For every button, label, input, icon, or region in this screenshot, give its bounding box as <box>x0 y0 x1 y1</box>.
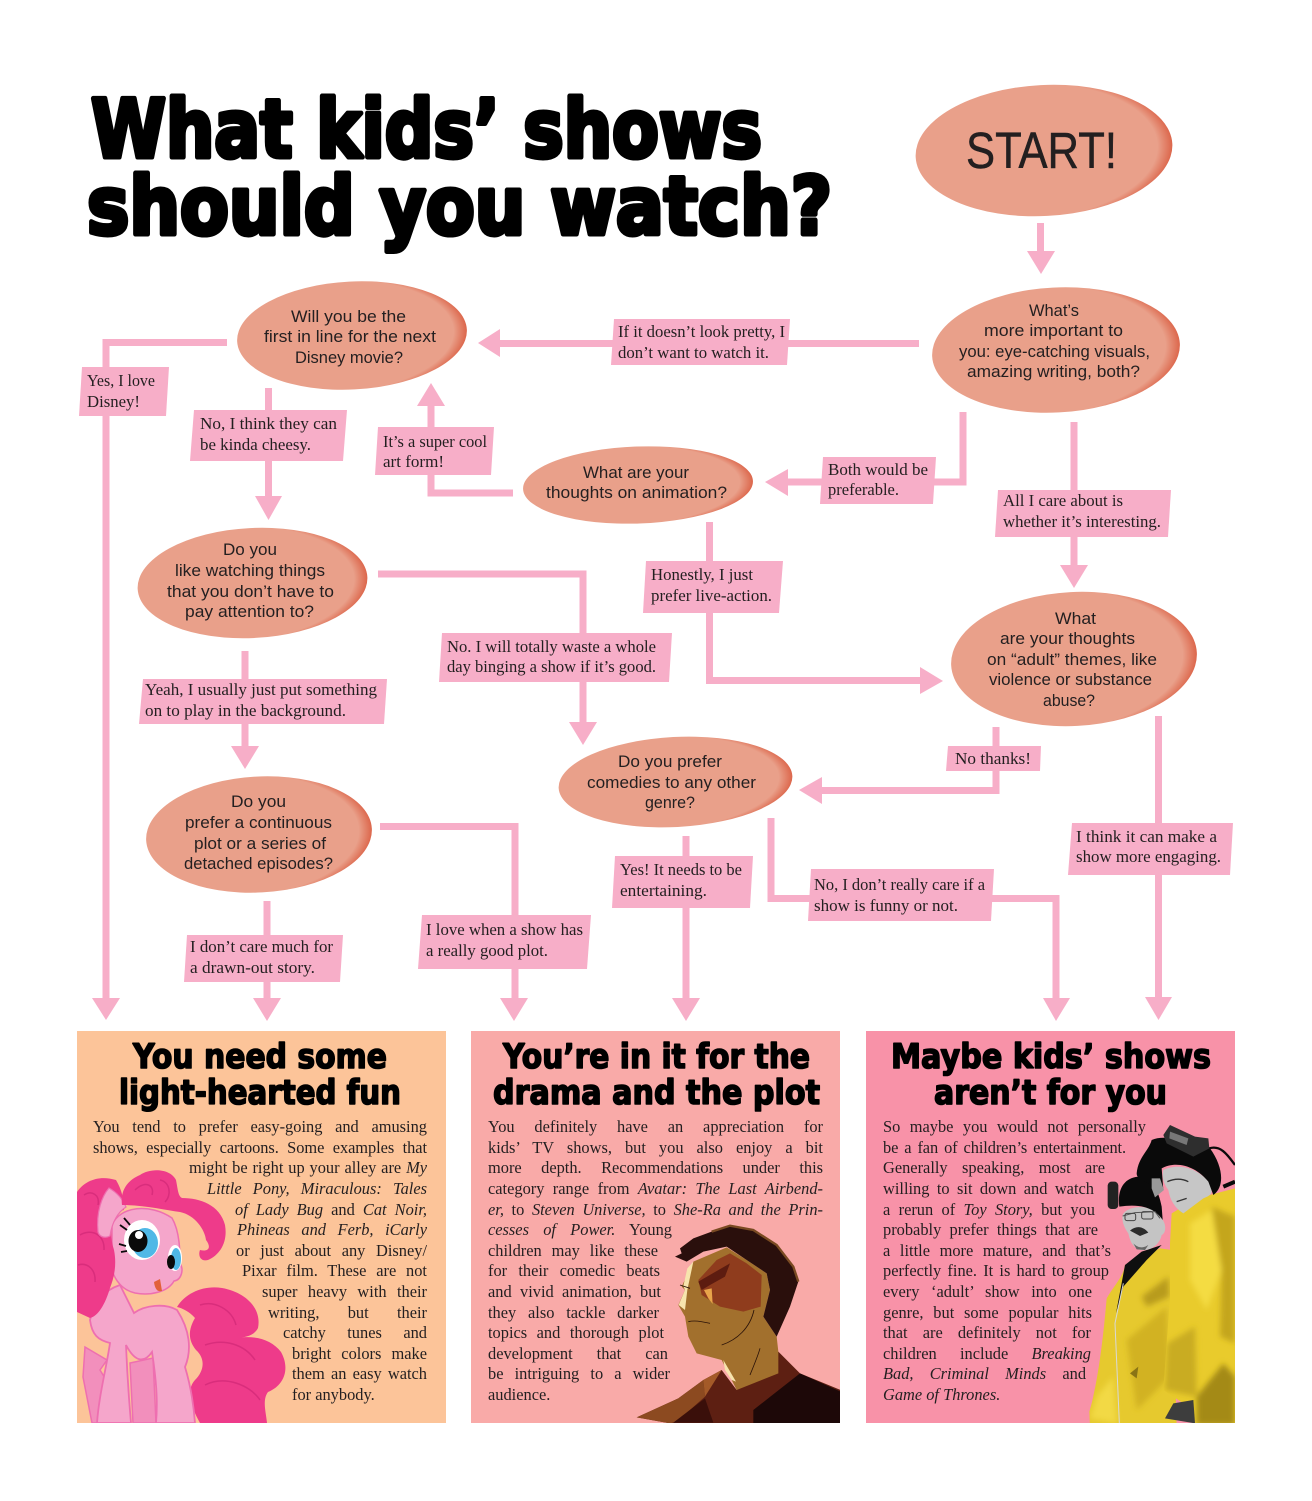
text: not for you result description: be a fan of children’s entertainment. <box>883 1138 1126 1157</box>
node: adult themes question: on “adult” themes, like <box>987 651 1157 669</box>
heading: you need some light-hearted fun: light-hearted fun <box>119 1073 401 1113</box>
node: background watching question: that you don’t have to <box>167 583 334 601</box>
label: no thanks: No thanks! <box>955 749 1031 768</box>
label: background <box>139 679 387 724</box>
label: good plot: a really good plot. <box>426 941 548 960</box>
label: not funny: show is funny or not. <box>814 896 958 915</box>
label: engaging: I think it can make a <box>1076 827 1218 846</box>
label: background: on to play in the background. <box>145 701 346 720</box>
node: comedies question <box>556 731 795 833</box>
node: background watching question: like watching things <box>175 562 325 580</box>
node: visuals or writing question: you: eye-catching visuals, <box>959 343 1150 361</box>
heading: maybe kids' shows aren't for you <box>891 1037 1211 1113</box>
text: light-hearted result description: might be right up your alley are My <box>189 1158 427 1177</box>
label: entertaining: entertaining. <box>620 881 707 900</box>
arrow: both to animation question <box>765 412 963 496</box>
label: drawn-out story: I don’t care much for <box>190 937 334 956</box>
node: comedies question: genre? <box>645 794 695 812</box>
arrow: visuals to Disney question <box>478 329 919 357</box>
label: both: Both would be <box>828 460 928 479</box>
node: adult themes question: are your thoughts <box>1000 630 1135 648</box>
node: continuous plot question: Do you <box>231 793 286 811</box>
text: drama result description: they also tackle darker <box>488 1303 659 1322</box>
illustration: two men in yellow suits <box>1089 1125 1235 1423</box>
arrow: start to visuals question <box>1027 223 1055 274</box>
text: light-hearted result description: for anybody. <box>292 1385 375 1404</box>
text: light-hearted result description: Phineas and Ferb, iCarly <box>237 1220 427 1239</box>
label: entertaining: Yes! It needs to be <box>620 860 742 879</box>
node: adult themes question <box>948 586 1200 732</box>
text: light-hearted result description: or just about any Disney/ <box>236 1241 427 1260</box>
heading: maybe kids' shows aren't for you: aren’t for you <box>934 1073 1167 1113</box>
illustration: pink pony <box>77 1170 286 1423</box>
node: visuals or writing question: more important to <box>984 322 1123 340</box>
label: art form <box>375 427 494 475</box>
label: pretty: don’t want to watch it. <box>618 343 769 362</box>
text: not for you result description: Generally speaking, most are <box>883 1158 1105 1177</box>
label: not funny <box>808 869 994 921</box>
panel: light-hearted fun result <box>77 1031 446 1423</box>
label: yes I love Disney: Yes, I love <box>87 371 155 390</box>
label: engaging <box>1068 823 1233 875</box>
text: not for you result description: genre, but some popular hits <box>883 1303 1092 1322</box>
text: drama result description: category range from Avatar: The Last Airbend- <box>488 1179 823 1198</box>
node: visuals or writing question: What’s <box>1029 302 1079 320</box>
label: good plot <box>418 915 591 969</box>
text: light-hearted result description: Little Pony, Miraculous: Tales <box>207 1179 427 1198</box>
text: light-hearted result description <box>93 1117 427 1404</box>
label: both <box>820 457 936 504</box>
label: cheesy: No, I think they can <box>200 414 337 433</box>
label: cheesy <box>190 410 347 461</box>
node: animation question: thoughts on animation? <box>546 484 727 502</box>
node: background watching question: pay attention to? <box>185 603 314 621</box>
node: continuous plot question: plot or a series of <box>194 835 326 853</box>
label: binging: No. I will totally waste a whole <box>447 637 656 656</box>
label: art form: It’s a super cool <box>383 432 487 451</box>
label: entertaining <box>612 856 753 908</box>
text: light-hearted result description: catchy tunes and <box>283 1323 427 1342</box>
text: light-hearted result description: You tend to prefer easy-going and amusing <box>93 1117 427 1136</box>
node: animation question: What are your <box>583 464 690 482</box>
text: light-hearted result description: Pixar film. These are not <box>242 1261 427 1280</box>
text: drama result description: children may like these <box>488 1241 658 1260</box>
node: Disney movie question <box>234 276 470 395</box>
node: continuous plot question: prefer a continuous <box>185 814 332 832</box>
label: cheesy: be kinda cheesy. <box>200 435 311 454</box>
label: background: Yeah, I usually just put something <box>145 680 377 699</box>
label: yes I love Disney: Disney! <box>87 392 140 411</box>
text: not for you result description: a rerun of Toy Story, but you <box>883 1200 1095 1219</box>
node: start: START! <box>966 122 1117 179</box>
node: visuals or writing question <box>929 281 1183 419</box>
label: good plot: I love when a show has <box>426 920 583 939</box>
arrow: live-action to adult themes question <box>710 522 943 694</box>
label: not funny: No, I don’t really care if a <box>814 875 986 894</box>
arrow: drawn-out story to light-hearted result <box>253 901 281 1021</box>
label: pretty <box>611 319 790 365</box>
text: not for you result description: willing to sit down and watch <box>883 1179 1094 1198</box>
heading: you need some light-hearted fun: You need some <box>132 1037 387 1077</box>
node: animation question <box>522 443 754 527</box>
node: adult themes question: What <box>1055 610 1096 628</box>
text: light-hearted result description: them an easy watch <box>292 1364 427 1383</box>
text: not for you result description: Game of Thrones. <box>883 1385 1000 1404</box>
text: drama result description: kids’ TV shows, but you also enjoy a bit <box>488 1138 823 1157</box>
text: drama result description: and vivid animation, but <box>488 1282 661 1301</box>
node: background watching question <box>135 522 370 644</box>
text: drama result description: You definitely have an appreciation for <box>488 1117 823 1136</box>
arrow: love Disney to light-hearted result <box>92 342 227 1020</box>
arrow: entertaining to drama result <box>672 836 700 1021</box>
label: art form: art form! <box>383 452 444 471</box>
text: drama result description: more depth. Recommendations under this <box>488 1158 823 1177</box>
text: not for you result description: a little more mature, and that’s <box>883 1241 1111 1260</box>
arrow: not funny to not-for-you result <box>771 818 1070 1021</box>
title: should you watch? <box>87 160 832 253</box>
arrow: no thanks to comedies question <box>799 727 996 804</box>
label: both: preferable. <box>828 480 899 499</box>
arrow: good plot to drama result <box>380 826 528 1021</box>
label: live-action <box>643 561 783 613</box>
arrow: art form to Disney question <box>417 383 513 493</box>
label: live-action: Honestly, I just <box>651 565 753 584</box>
node: Disney movie question: first in line for the next <box>264 328 436 346</box>
text: not for you result description: that are definitely not for <box>883 1323 1091 1342</box>
panel: kids' shows aren't for you result <box>866 1031 1235 1423</box>
heading: you're in it for the drama and the plot <box>493 1037 820 1113</box>
illustration: scarred animated character <box>636 1224 840 1423</box>
label: binging <box>439 633 672 682</box>
text: drama result description: for their comedic beats <box>488 1261 660 1280</box>
text: drama result description: development that can <box>488 1344 668 1363</box>
node: comedies question: comedies to any other <box>587 774 757 792</box>
label: live-action: prefer live-action. <box>651 586 772 605</box>
node: comedies question: Do you prefer <box>618 753 723 771</box>
label: binging: day binging a show if it’s good. <box>447 657 656 676</box>
label: pretty: If it doesn’t look pretty, I <box>618 322 785 341</box>
title <box>87 83 832 253</box>
text: not for you result description: Bad, Criminal Minds and <box>883 1364 1086 1383</box>
text: drama result description: er, to Steven Universe, to She-Ra and the Prin- <box>488 1200 823 1219</box>
text: light-hearted result description: of Lady Bug and Cat Noir, <box>235 1200 427 1219</box>
node: continuous plot question: detached episodes? <box>184 855 333 873</box>
label: yes I love Disney <box>79 367 169 416</box>
label: interesting: All I care about is <box>1003 491 1123 510</box>
arrow: binging to comedies question <box>378 574 597 745</box>
node: background watching question: Do you <box>223 541 277 559</box>
label: interesting: whether it’s interesting. <box>1003 512 1161 531</box>
node: adult themes question: violence or substance <box>989 671 1152 689</box>
text: not for you result description: children include Breaking <box>883 1344 1091 1363</box>
heading: you need some light-hearted fun <box>119 1037 401 1113</box>
node: visuals or writing question: amazing writing, both? <box>967 363 1140 381</box>
title: What kids’ shows <box>91 83 762 176</box>
label: drawn-out story: a drawn-out story. <box>190 958 315 977</box>
node: start <box>912 78 1176 223</box>
text: not for you result description: probably prefer things that are <box>883 1220 1098 1239</box>
panel: drama and plot result <box>471 1031 840 1423</box>
text: not for you result description <box>883 1117 1146 1404</box>
text: not for you result description: perfectly fine. It is hard to group <box>883 1261 1109 1280</box>
text: drama result description <box>488 1117 823 1404</box>
arrow: cheesy to background question <box>255 388 282 520</box>
label: drawn-out story <box>184 935 343 982</box>
text: drama result description: cesses of Power. Young <box>488 1220 672 1239</box>
text: drama result description: be intriguing to a wider <box>488 1364 670 1383</box>
text: not for you result description: So maybe you would not personally <box>883 1117 1146 1136</box>
node: Disney movie question: Disney movie? <box>295 349 403 367</box>
arrow: engaging to not-for-you result <box>1145 716 1172 1020</box>
arrow: interesting to adult themes question <box>1060 422 1088 588</box>
node: Disney movie question: Will you be the <box>291 308 406 326</box>
node: adult themes question: abuse? <box>1043 692 1095 710</box>
node: continuous plot question <box>143 771 375 898</box>
label: no thanks <box>946 746 1041 771</box>
text: light-hearted result description: writing, but their <box>268 1303 427 1322</box>
text: light-hearted result description: bright colors make <box>292 1344 427 1363</box>
label: engaging: show more engaging. <box>1076 847 1221 866</box>
text: light-hearted result description: shows, especially cartoons. Some examples that <box>93 1138 427 1157</box>
text: drama result description: audience. <box>488 1385 550 1404</box>
text: light-hearted result description: super heavy with their <box>262 1282 427 1301</box>
arrow: background to plot question <box>231 651 259 769</box>
text: drama result description: topics and thorough plot <box>488 1323 664 1342</box>
label: interesting <box>995 490 1171 537</box>
text: not for you result description: every ‘adult’ show into one <box>883 1282 1092 1301</box>
